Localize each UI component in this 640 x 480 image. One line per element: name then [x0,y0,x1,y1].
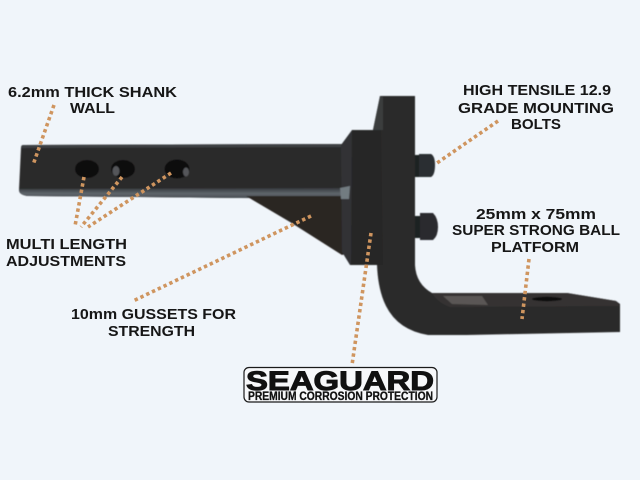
leader: gussets [133,216,311,301]
leader: hole 3 [88,173,171,227]
weld collar [341,130,362,265]
bolt upper [413,154,435,177]
label: shank wall: 6.2mm THICK SHANK [8,84,177,101]
label: ball platform: SUPER STRONG BALL [452,222,620,239]
L bracket [373,96,620,335]
label: shank wall [8,84,177,117]
label: shank wall: WALL [70,100,115,117]
label: gussets [71,306,236,340]
drawbar hardware [19,96,620,335]
gusset [246,196,345,255]
mounting plate [351,130,383,265]
label: multi length [6,236,127,270]
label: bolts: GRADE MOUNTING [458,100,614,117]
bolt lower [413,213,438,240]
label: gussets: STRENGTH [108,323,195,340]
label: ball platform: 25mm x 75mm [476,206,596,223]
hole 2 [111,160,135,178]
label: ball platform [452,206,620,256]
label: bolts: BOLTS [511,116,561,133]
seaguard logo [244,366,437,403]
label: bolts [458,82,614,133]
label: multi length: ADJUSTMENTS [6,253,126,270]
leader: ball platform [522,259,529,319]
label: gussets: 10mm GUSSETS FOR [71,306,236,323]
hole 3 [164,160,190,178]
seaguard logo: PREMIUM CORROSION PROTECTION [248,389,433,403]
shank tube [19,144,345,199]
hole 1 [75,160,99,178]
leader: hole 2 [81,177,122,227]
leader: seaguard [352,233,371,365]
label: multi length: MULTI LENGTH [6,236,127,253]
leader: bolts [437,121,498,163]
seaguard logo: SEAGUARD [246,366,434,396]
leader: shank wall [33,105,54,165]
leader: hole 1 [75,177,84,226]
label: ball platform: PLATFORM [491,239,579,256]
label: bolts: HIGH TENSILE 12.9 [463,82,611,99]
